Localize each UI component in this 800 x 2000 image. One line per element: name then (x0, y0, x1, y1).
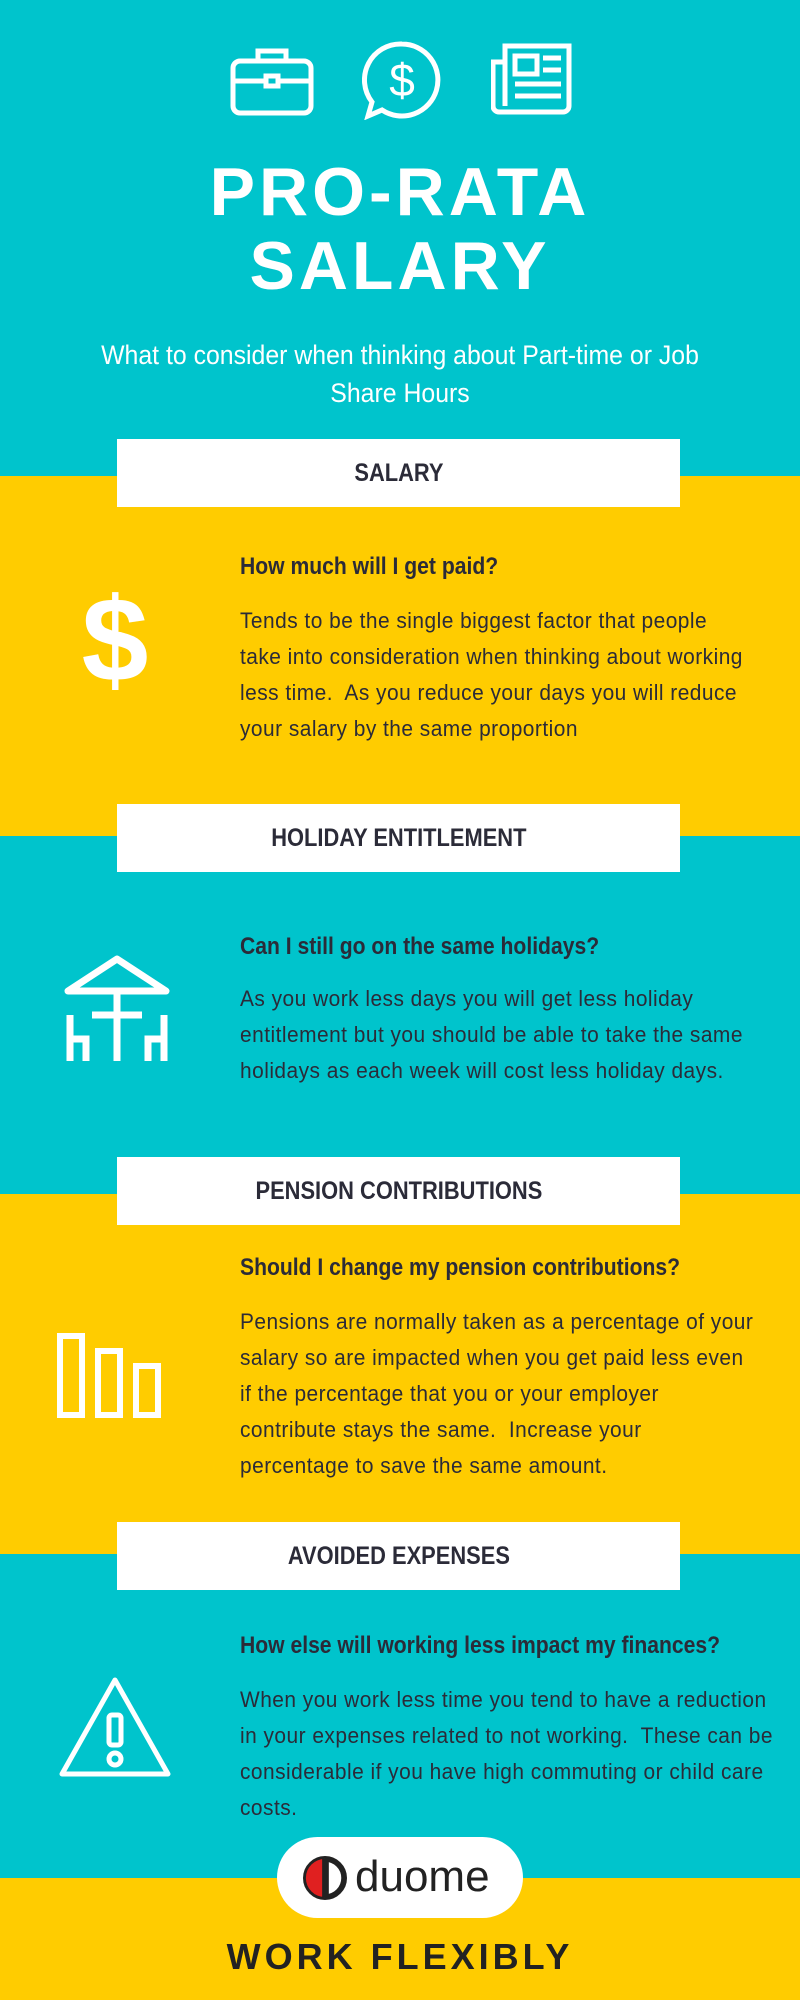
tagline: WORK FLEXIBLY (227, 1936, 573, 1977)
icon: dollar speech bubble: $ (389, 54, 415, 106)
body: salary: less time. As you reduce your days you will reduce (240, 680, 737, 705)
logo: duome: duome (355, 1852, 490, 1901)
body: pension: contribute stays the same. Increase your (240, 1417, 642, 1442)
icon: dollar: $ (82, 573, 148, 707)
question: avoided: How else will working less impact my finances? (240, 1632, 720, 1659)
question: holiday: Can I still go on the same holidays? (240, 933, 599, 960)
body: holiday: As you work less days you will get less holiday (240, 986, 693, 1011)
header: salary: SALARY (354, 459, 443, 487)
header: holiday (117, 804, 680, 872)
logo: duome (277, 1837, 523, 1918)
title: SALARY (249, 228, 551, 304)
header: salary (117, 439, 680, 507)
body: avoided: considerable if you have high commuting or child care (240, 1759, 764, 1784)
title (210, 154, 590, 304)
body: salary: your salary by the same proportion (240, 716, 578, 741)
title: PRO-RATA (210, 154, 590, 230)
icon: newspaper (491, 44, 572, 114)
header: pension (117, 1157, 680, 1225)
header: avoided expenses: AVOIDED EXPENSES (287, 1542, 510, 1570)
body: holiday (240, 986, 743, 1083)
icon: dollar speech bubble (362, 42, 440, 120)
body: avoided: When you work less time you tend to have a reduction (240, 1687, 767, 1712)
icon: bar chart (57, 1333, 161, 1418)
body: pension: if the percentage that you or your employer (240, 1381, 659, 1406)
body: salary: take into consideration when thinking about working (240, 644, 743, 669)
header: avoided expenses (117, 1522, 680, 1590)
header: pension: PENSION CONTRIBUTIONS (255, 1177, 542, 1205)
subtitle (101, 340, 699, 408)
body: pension (240, 1309, 753, 1478)
icon: briefcase (230, 48, 314, 116)
body: pension: percentage to save the same amount. (240, 1453, 608, 1478)
body: holiday: holidays as each week will cost less holiday days. (240, 1058, 724, 1083)
header: holiday: HOLIDAY ENTITLEMENT (271, 824, 526, 852)
question: pension: Should I change my pension contributions? (240, 1254, 680, 1281)
subtitle: What to consider when thinking about Part-time or Job (101, 340, 699, 370)
icon: warning (60, 1678, 170, 1776)
body: avoided: costs. (240, 1795, 297, 1820)
subtitle: Share Hours (330, 378, 470, 408)
body: pension: salary so are impacted when you get paid less even (240, 1345, 744, 1370)
icon: parasol table (64, 956, 170, 1061)
body: avoided: in your expenses related to not working. These can be (240, 1723, 773, 1748)
body: salary (240, 608, 743, 741)
body: pension: Pensions are normally taken as a percentage of your (240, 1309, 753, 1334)
body: holiday: entitlement but you should be able to take the same (240, 1022, 743, 1047)
body: avoided (240, 1687, 773, 1820)
body: salary: Tends to be the single biggest factor that people (240, 608, 707, 633)
question: salary: How much will I get paid? (240, 553, 498, 580)
